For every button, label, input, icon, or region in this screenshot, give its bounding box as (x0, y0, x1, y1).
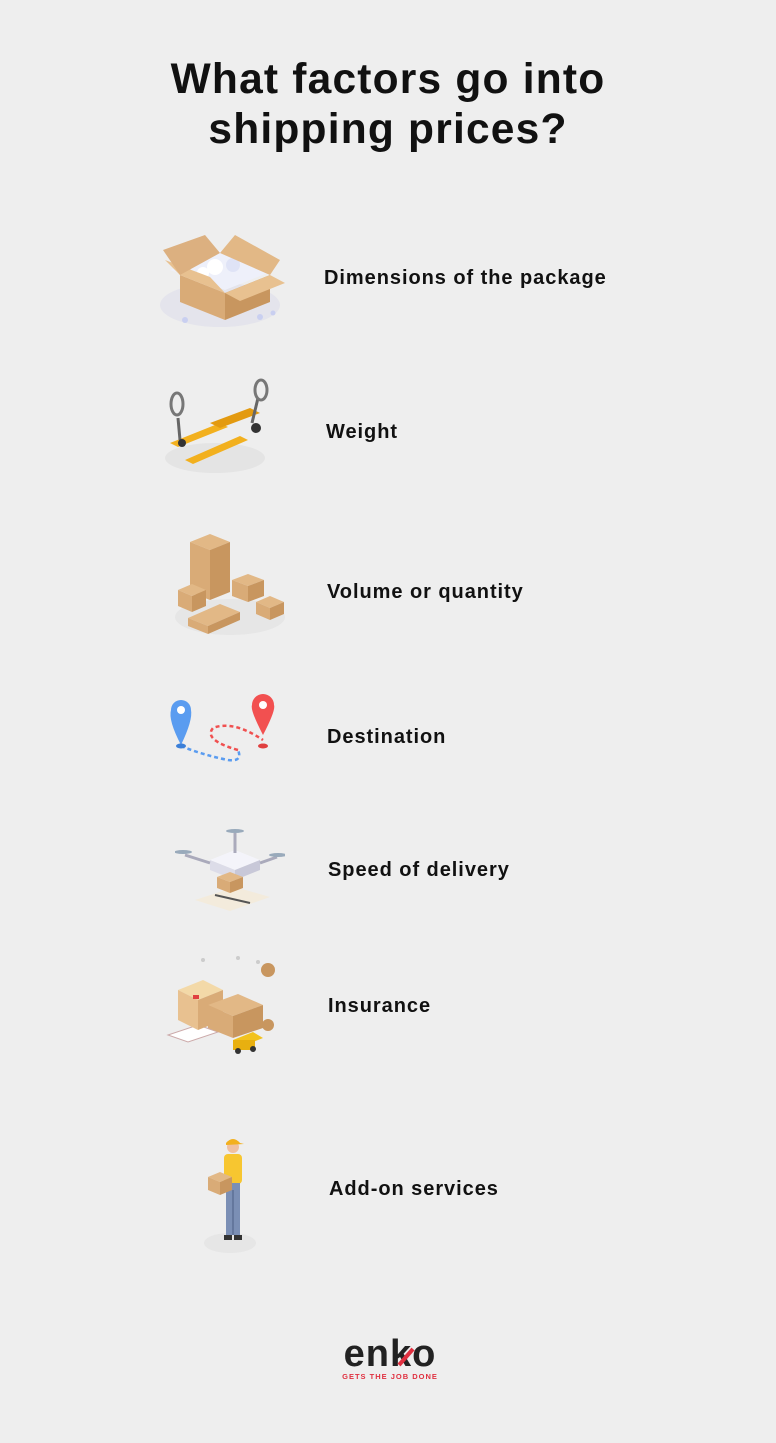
label: weight: Weight (326, 421, 398, 443)
label: volume: Volume or quantity (327, 581, 524, 603)
title: What factors go into (171, 56, 605, 103)
logo tagline: GETS THE JOB DONE (342, 1372, 438, 1381)
title: shipping prices? (208, 106, 568, 153)
icon: stacked boxes (178, 534, 284, 634)
logo (342, 1333, 438, 1381)
icon: courier (208, 1139, 244, 1240)
icon: drone (175, 829, 285, 911)
label: add-on: Add-on services (329, 1178, 499, 1200)
icon: pallet jack (165, 378, 268, 473)
icon: insurance scene (166, 956, 275, 1054)
label: dimensions: Dimensions of the package (324, 267, 607, 289)
label: insurance: Insurance (328, 995, 431, 1017)
label: speed: Speed of delivery (328, 859, 510, 881)
icon: destination pins (170, 694, 274, 762)
logo wordmark: enko (344, 1333, 436, 1375)
icon: open box (160, 235, 285, 327)
title (170, 56, 605, 153)
label: destination: Destination (327, 726, 446, 748)
